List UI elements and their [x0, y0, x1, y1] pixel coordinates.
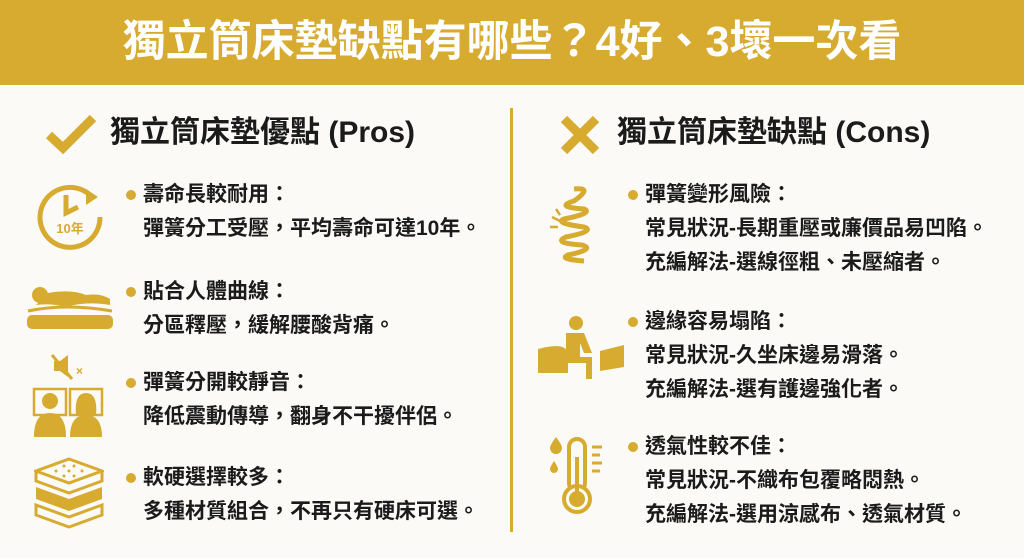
item: quiet — [126, 370, 458, 428]
item: firmness options: 多種材質組合，不再只有硬床可選。 — [143, 500, 479, 523]
icon: thermometer — [550, 437, 602, 514]
panel: pros — [27, 114, 481, 529]
item: spring deformation: 彈簧變形風險： — [645, 183, 792, 206]
icon: deformed spring — [550, 186, 590, 264]
item: spring deformation — [628, 182, 988, 274]
item: spring deformation: 充編解法-選線徑粗、未壓縮者。 — [645, 251, 946, 274]
icon: stacked mattress layers — [34, 457, 104, 529]
icon: silent couple — [32, 354, 104, 437]
item: body contour: 貼合人體曲線： — [143, 280, 290, 303]
item: quiet: 彈簧分開較靜音： — [143, 371, 311, 394]
item: quiet: 降低震動傳導，翻身不干擾伴侶。 — [143, 405, 458, 428]
title: 獨立筒床墊缺點有哪些？4好、3壞一次看 — [123, 18, 901, 66]
item: spring deformation: 常見狀況-長期重壓或廉價品易凹陷。 — [645, 217, 988, 240]
icon: silent couple: × — [76, 364, 83, 378]
item: firmness options — [126, 466, 479, 523]
item: edge collapse: 邊緣容易塌陷： — [645, 310, 792, 333]
icon: X mark — [560, 116, 600, 154]
item: body contour — [126, 280, 395, 337]
icon: person sitting on bed edge — [538, 316, 624, 379]
item: poor breathability: 充編解法-選用涼感布、透氣材質。 — [645, 503, 967, 526]
item: body contour: 分區釋壓，緩解腰酸背痛。 — [143, 314, 395, 337]
item: firmness options: 軟硬選擇較多： — [143, 466, 290, 489]
item: lifespan: 彈簧分工受壓，平均壽命可達10年。 — [143, 217, 481, 240]
icon: body on mattress — [27, 287, 113, 329]
item: poor breathability: 透氣性較不佳： — [645, 435, 792, 458]
icon: check mark — [46, 114, 96, 154]
icon: clock 10 years: 10年 — [56, 221, 84, 236]
item: lifespan — [126, 182, 481, 240]
divider line — [510, 108, 513, 532]
item: edge collapse — [628, 310, 904, 401]
icon: clock 10 years — [38, 184, 102, 250]
item: edge collapse: 充編解法-選有護邊強化者。 — [645, 378, 904, 401]
item: poor breathability: 常見狀況-不織布包覆略悶熱。 — [645, 469, 925, 492]
item: poor breathability — [628, 434, 967, 526]
panel: cons — [538, 116, 988, 526]
item: lifespan: 壽命長較耐用： — [143, 183, 290, 206]
heading: cons: 獨立筒床墊缺點 (Cons) — [617, 116, 930, 149]
item: edge collapse: 常見狀況-久坐床邊易滑落。 — [645, 344, 904, 367]
heading: pros: 獨立筒床墊優點 (Pros) — [110, 116, 415, 149]
header band — [0, 0, 1024, 85]
